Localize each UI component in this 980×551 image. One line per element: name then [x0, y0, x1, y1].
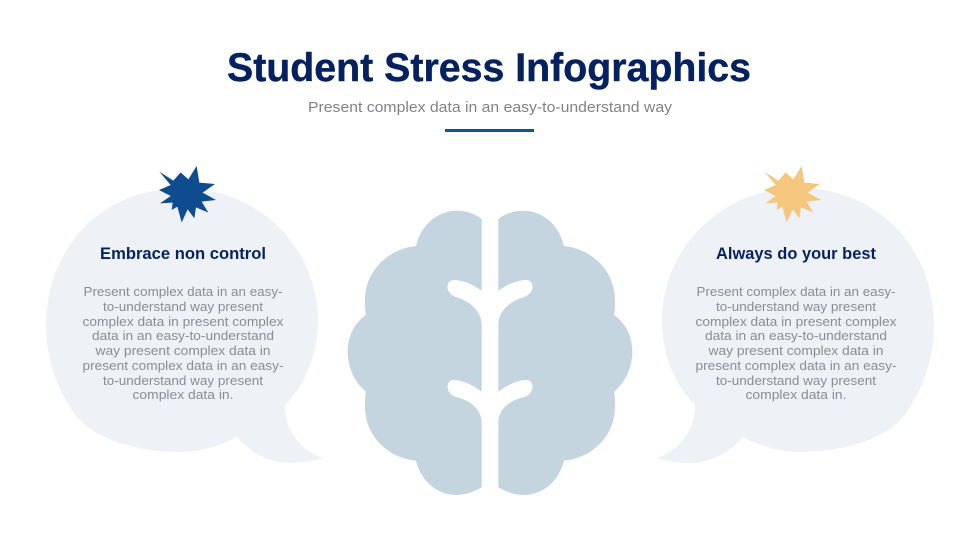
panel: always do your best [657, 166, 934, 463]
right hemisphere [498, 211, 632, 495]
body text right: complex data in. [746, 387, 846, 402]
speech bubble left [46, 188, 323, 463]
body text right: way present complex data in [707, 343, 884, 358]
subtitle: Present complex data in an easy-to-understand way [308, 99, 673, 116]
body text left: way present complex data in [94, 343, 270, 358]
body text right: to-understand way present [716, 299, 876, 314]
title: Student Stress Infographics [227, 46, 751, 90]
body text left: to-understand way present [103, 299, 263, 314]
heading left: Embrace non control [100, 245, 266, 263]
body text left: present complex data in an easy- [82, 358, 284, 373]
title underline [445, 129, 534, 132]
body text left: Present complex data in an easy- [84, 284, 282, 299]
body text left: to-understand way present [103, 373, 263, 388]
body text right: complex data in present complex [696, 314, 897, 329]
speech bubble right [657, 188, 934, 463]
left hemisphere [348, 211, 482, 495]
panel: embrace non control [46, 166, 323, 463]
heading right: Always do your best [716, 245, 876, 263]
body text left: complex data in. [132, 387, 234, 402]
body text right: to-understand way present [716, 373, 876, 388]
body text left: complex data in present complex [82, 314, 284, 329]
body text right: Present complex data in an easy- [696, 284, 896, 299]
body text left [82, 284, 284, 402]
body text left: data in an easy-to-understand [92, 328, 274, 343]
body text right: present complex data in an easy- [696, 358, 896, 373]
body text right [696, 284, 897, 402]
body text right: data in an easy-to-understand [705, 328, 887, 343]
icon: brain [348, 211, 632, 495]
icon: navy starburst [159, 166, 216, 222]
icon: orange starburst [764, 166, 821, 222]
